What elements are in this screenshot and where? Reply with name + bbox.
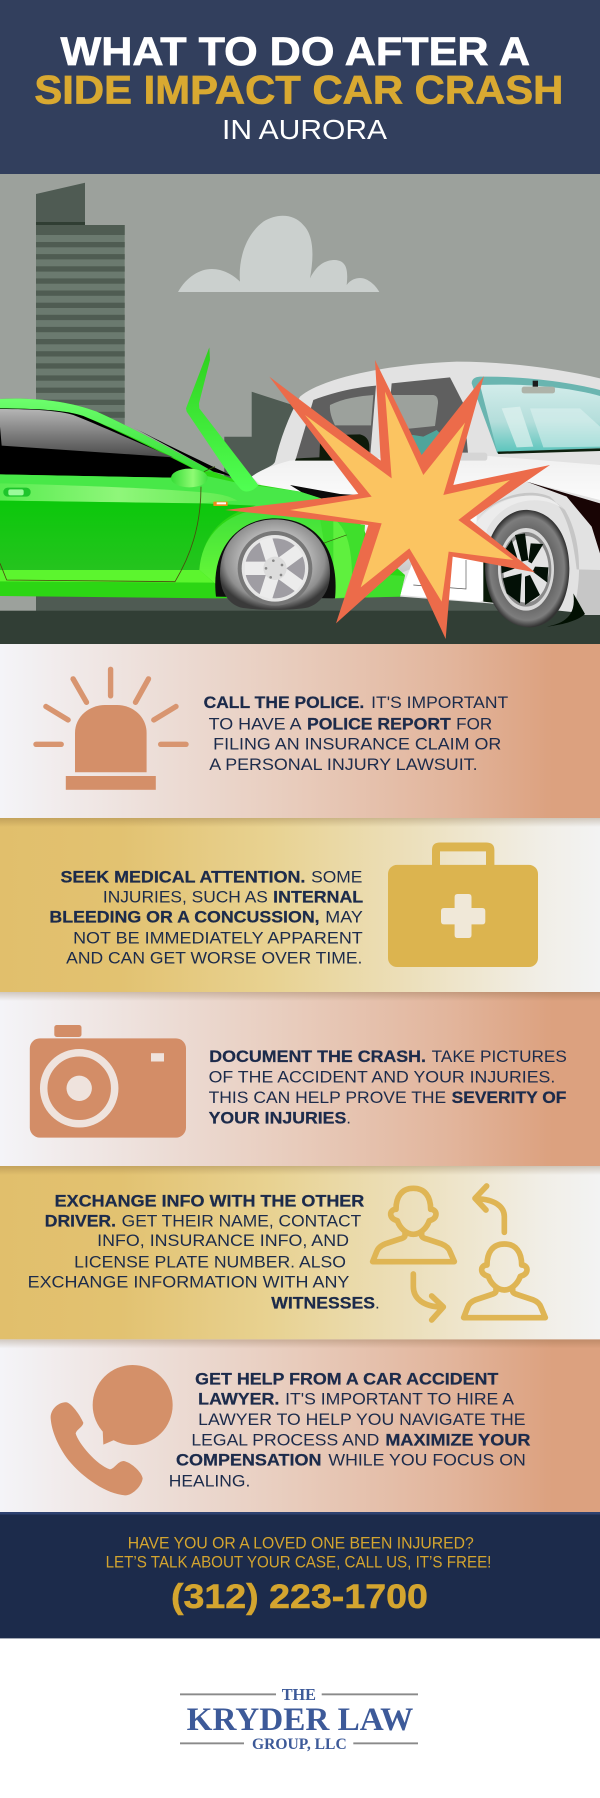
text: exchange info: EXCHANGE INFORMATION WITH ANY	[28, 1272, 349, 1291]
header panel	[0, 0, 600, 174]
ground and road	[0, 590, 600, 644]
title line 2: SIDE IMPACT CAR CRASH	[34, 69, 563, 113]
text: document the crash	[209, 1047, 567, 1128]
text: exchange info	[28, 1191, 380, 1312]
call to action text	[106, 1534, 491, 1572]
cloud	[178, 216, 379, 292]
text: exchange info: EXCHANGE INFO WITH THE OTHER	[55, 1191, 364, 1210]
white car	[252, 362, 600, 627]
text: document the crash: OF THE ACCIDENT AND YOUR INJURIES.	[209, 1068, 555, 1086]
text: document the crash: DOCUMENT THE CRASH.	[209, 1047, 426, 1066]
text: exchange info: WITNESSES	[271, 1294, 375, 1312]
text: seek medical attention: SOME	[311, 867, 362, 886]
call to action text: LET’S TALK ABOUT YOUR CASE, CALL US, IT’S FREE!	[106, 1554, 491, 1572]
logo: the kryder law group: KRYDER LAW	[187, 1702, 413, 1738]
text: get help from a lawyer: LAWYER TO HELP YOU NAVIGATE THE	[198, 1410, 525, 1429]
text: call the police: TO HAVE A	[209, 714, 302, 734]
text: get help from a lawyer: LEGAL PROCESS AND	[191, 1431, 379, 1450]
icon: two people exchanging	[373, 1186, 545, 1320]
title line 1: WHAT TO DO AFTER A	[60, 30, 530, 74]
logo: the kryder law group: GROUP, LLC	[252, 1736, 347, 1753]
text: call the police: FILING AN INSURANCE CLAIM OR	[213, 734, 501, 754]
door handle	[3, 488, 31, 497]
text: exchange info: INFO, INSURANCE INFO, AND	[97, 1231, 349, 1250]
call to action panel	[0, 1512, 600, 1638]
icon: siren	[36, 669, 186, 790]
tower building	[36, 183, 125, 610]
text: seek medical attention: AND CAN GET WORSE OVER TIME.	[66, 948, 362, 967]
green car wheel	[215, 518, 336, 610]
text: exchange info: LICENSE PLATE NUMBER. ALSO	[74, 1252, 346, 1271]
text: document the crash: TAKE PICTURES	[432, 1047, 567, 1066]
text: seek medical attention: SEEK MEDICAL ATTENTION.	[60, 867, 305, 886]
panel: call the police	[0, 644, 600, 818]
icon: camera	[30, 1025, 186, 1138]
text: call the police: CALL THE POLICE.	[204, 693, 364, 712]
text: call the police: IT'S IMPORTANT	[371, 693, 508, 712]
text: exchange info: .	[375, 1294, 380, 1312]
text: document the crash: THIS CAN HELP PROVE THE	[209, 1088, 446, 1107]
text: call the police: FOR	[456, 714, 492, 734]
text: get help from a lawyer	[169, 1370, 530, 1491]
text: get help from a lawyer: MAXIMIZE YOUR	[385, 1431, 530, 1450]
text: seek medical attention: NOT BE IMMEDIATELY APPARENT	[73, 928, 363, 947]
background building	[224, 392, 305, 490]
text: call the police: POLICE REPORT	[307, 714, 451, 734]
text: seek medical attention: INTERNAL	[273, 888, 363, 907]
panel: get help from a lawyer	[0, 1339, 600, 1512]
side mirror	[171, 469, 208, 487]
text: call the police: A PERSONAL INJURY LAWSUIT.	[209, 755, 478, 774]
text: get help from a lawyer: GET HELP FROM A CAR ACCIDENT	[195, 1370, 499, 1389]
explosion burst	[225, 360, 550, 639]
phone number: (312) 223-1700	[171, 1578, 428, 1616]
icon: first aid kit	[388, 842, 538, 967]
green car	[0, 347, 405, 610]
text: seek medical attention: INJURIES, SUCH AS	[103, 888, 268, 907]
text: seek medical attention	[49, 867, 363, 967]
text: document the crash: .	[346, 1108, 351, 1128]
text: get help from a lawyer: IT'S IMPORTANT TO HIRE A	[285, 1390, 515, 1408]
panel: seek medical attention	[0, 818, 600, 992]
illustration: crash scene	[0, 174, 600, 644]
icon: phone and speech bubble	[51, 1365, 173, 1495]
text: get help from a lawyer: WHILE YOU FOCUS ON	[328, 1450, 526, 1470]
text: call the police	[204, 693, 508, 774]
text: exchange info: DRIVER.	[45, 1211, 116, 1230]
logo: the kryder law group	[180, 1685, 418, 1753]
panel: document the crash	[0, 992, 600, 1166]
text: seek medical attention: BLEEDING OR A CONCUSSION,	[49, 907, 320, 926]
text: document the crash: SEVERITY OF	[452, 1088, 566, 1107]
panel: exchange info	[0, 1166, 600, 1339]
text: seek medical attention: MAY	[325, 907, 363, 926]
text: get help from a lawyer: HEALING.	[169, 1472, 250, 1491]
text: get help from a lawyer: LAWYER.	[198, 1390, 279, 1408]
logo: the kryder law group: THE	[282, 1685, 316, 1704]
text: exchange info: GET THEIR NAME, CONTACT	[122, 1211, 361, 1230]
turn signal	[213, 502, 228, 506]
text: get help from a lawyer: COMPENSATION	[176, 1450, 322, 1470]
raised hood	[186, 347, 258, 492]
call to action text: HAVE YOU OR A LOVED ONE BEEN INJURED?	[128, 1534, 474, 1552]
title line 3: IN AURORA	[222, 114, 387, 145]
text: document the crash: YOUR INJURIES	[209, 1108, 346, 1128]
